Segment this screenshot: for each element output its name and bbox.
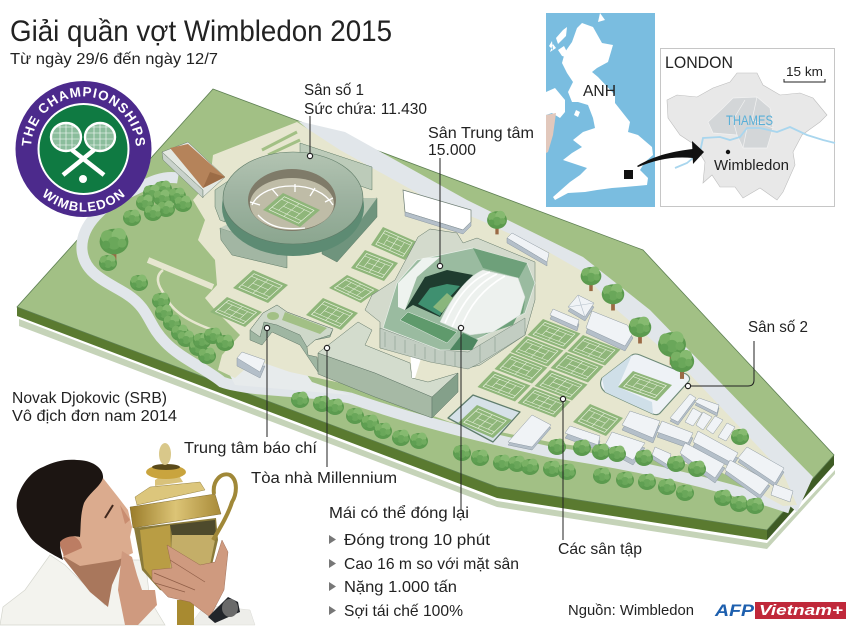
leader: Millennium building (324, 345, 330, 467)
title: Giải quần vợt Wimbledon 2015 (10, 15, 392, 48)
face (63, 478, 133, 566)
subtitle: Từ ngày 29/6 đến ngày 12/7 (10, 51, 218, 68)
courts: left group (210, 227, 417, 330)
label: Novak Djokovic (12, 390, 177, 425)
label: Novak Djokovic: Vô địch đơn nam 2014 (12, 408, 177, 425)
leader: Court No. 1 (307, 116, 313, 159)
source: Nguồn: Wimbledon (568, 602, 694, 619)
text block: retractable roof: Mái có thể đóng lại (329, 504, 469, 522)
label: Novak Djokovic: Novak Djokovic (SRB) (12, 390, 167, 407)
Ireland (546, 13, 605, 153)
label: ANH: ANH (583, 83, 616, 100)
label: Court No. 1: Sức chứa: 11.430 (304, 101, 427, 118)
paved grounds (193, 122, 797, 506)
label: Court No. 2: Sân số 2 (748, 319, 808, 336)
text block: retractable roof (329, 504, 519, 620)
neck (63, 535, 125, 607)
scale bar: 15 km (786, 64, 823, 79)
building: brown roof hall (162, 142, 225, 198)
text block: retractable roof: Nặng 1.000 tấn (344, 579, 457, 596)
label: Court No. 1 (304, 82, 427, 118)
label: practice courts: Các sân tập (558, 541, 642, 558)
logo: AFP Vietnam+: Vietnam+ (759, 602, 843, 619)
lawn paths (148, 132, 300, 330)
label: Millennium building: Tòa nhà Millennium (251, 470, 397, 487)
map: UK locator (546, 13, 655, 207)
text block: retractable roof: Đóng trong 10 phút (344, 532, 491, 549)
text block: retractable roof: Cao 16 m so với mặt sân (344, 556, 519, 573)
base slab (17, 89, 835, 549)
label: press centre: Trung tâm báo chí (184, 440, 318, 457)
leader: Centre Court (437, 158, 443, 269)
trees (99, 180, 764, 514)
ear (58, 535, 82, 556)
building: Press centre (250, 305, 333, 372)
river Thames (675, 127, 835, 168)
icon: tennis ball (79, 175, 87, 183)
building: Millennium (318, 322, 458, 418)
marker: London on UK map (624, 170, 633, 179)
panel: Wimbledon site map (17, 89, 835, 549)
label: Thames: THAMES (726, 112, 773, 128)
hands (118, 551, 157, 625)
label: Centre Court: Sân Trung tâm (428, 125, 534, 142)
label: London: LONDON (665, 53, 733, 72)
label: Centre Court (428, 125, 534, 159)
leader: press centre (264, 325, 270, 437)
buildings: white service cluster (508, 295, 793, 502)
label: Court No. 1: Sân số 1 (304, 82, 364, 99)
leader: retractable roof (458, 325, 464, 510)
logo: The Championships Wimbledon: THE CHAMPIONSHIPS (22, 87, 145, 146)
label: Centre Court: 15.000 (428, 142, 476, 159)
logo: AFP Vietnam+: AFP (714, 601, 755, 620)
stadium: Court No. 2 (601, 354, 690, 415)
roads (82, 121, 813, 512)
text block: retractable roof: Sợi tái chế 100% (344, 603, 463, 620)
wristwatch (208, 597, 240, 623)
hair (17, 460, 103, 560)
shirt (0, 555, 165, 625)
label: Wimbledon: Wimbledon (714, 157, 789, 174)
trophy (130, 443, 236, 625)
leader: practice courts (560, 396, 566, 540)
building: white hall near Centre Court (403, 190, 549, 266)
courts: practice block (478, 319, 623, 436)
building: small white block (237, 352, 265, 378)
stadium: Centre Court (365, 229, 535, 369)
icon: crossed rackets (51, 123, 115, 175)
leader: Court No. 2 (685, 341, 754, 389)
logo: The Championships Wimbledon: WIMBLEDON (43, 188, 125, 212)
logo: The Championships Wimbledon (16, 81, 152, 217)
logo: AFP Vietnam+ (714, 601, 846, 620)
stadium: Court No. 1 (215, 143, 377, 268)
marker: Wimbledon (726, 150, 730, 154)
photo: Djokovic kissing trophy (0, 443, 255, 625)
Great Britain (553, 23, 653, 200)
map: London (660, 48, 835, 206)
arrow: UK to London (637, 141, 704, 167)
show court: lower left (448, 395, 520, 442)
